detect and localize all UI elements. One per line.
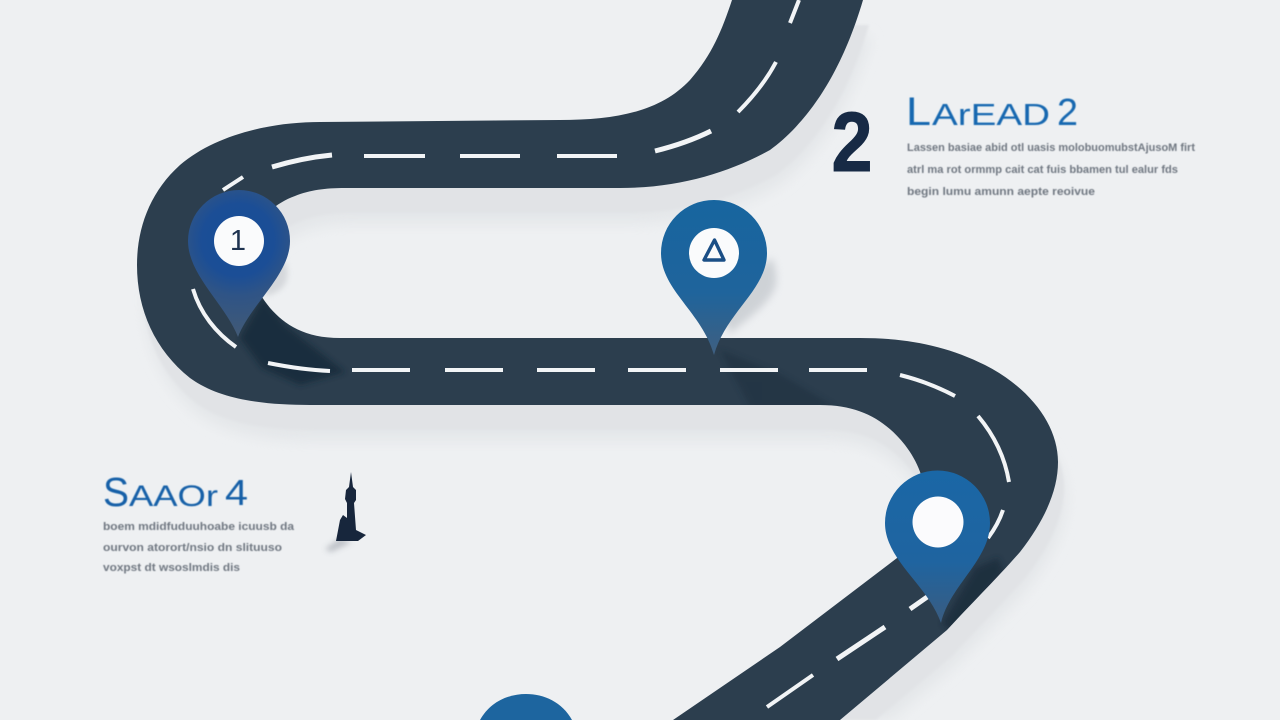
marker face: [214, 216, 264, 266]
heading: step 2: [906, 90, 1078, 134]
step number 1: 1: [230, 225, 246, 257]
road centre dashes: [193, 0, 1009, 707]
icon: tower monument: [325, 472, 366, 552]
body copy: step 4: ourvon atorort/nsio dn slituuso: [103, 542, 282, 554]
pin 2: [661, 200, 776, 355]
heading: step 4: 4: [225, 472, 248, 513]
pin 3: [885, 471, 990, 623]
road shadow: [145, 26, 1064, 720]
heading number 2: 2: [832, 95, 872, 189]
marker face: [912, 496, 964, 548]
body copy: step 2: [907, 142, 1195, 198]
heading: step 2: ArEAD: [932, 97, 1050, 132]
heading: step 2: L: [906, 90, 931, 134]
heading: step 4: S: [103, 469, 129, 515]
heading: step 4: [103, 469, 248, 515]
pin 1: [188, 190, 290, 337]
road: [130, 0, 1065, 720]
text block: step 4: [103, 469, 295, 574]
road shading under pins: [240, 297, 1004, 632]
body copy: step 2: begin lumu amunn aepte reoivue: [907, 186, 1095, 198]
pin 4 partially visible: [480, 694, 572, 720]
body copy: step 4: boem mdidfuduuhoabe icuusb da: [103, 521, 295, 533]
heading: step 4: AAOr: [129, 480, 218, 513]
body copy: step 4: [103, 521, 295, 574]
body copy: step 2: Lassen basiae abid otl uasis molobuomubstAjusoM firt: [907, 142, 1195, 154]
body copy: step 2: atrl ma rot ormmp cait cat fuis bbamen tul ealur fds: [907, 164, 1178, 176]
text block: step 2: [906, 90, 1195, 198]
heading: step 2: 2: [1057, 92, 1078, 134]
body copy: step 4: voxpst dt wsoslmdis dis: [103, 562, 240, 574]
marker face: [689, 228, 739, 278]
icon: triangle: [704, 240, 724, 260]
